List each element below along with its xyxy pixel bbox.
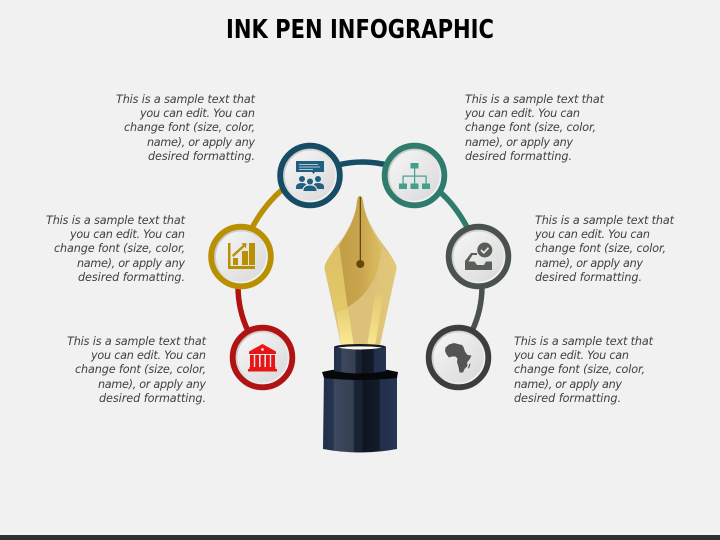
badge: hierarchy <box>385 146 444 205</box>
text block: bottom right: name), or apply any <box>514 378 622 391</box>
text block: bottom left: desired formatting. <box>99 392 206 405</box>
text block: bottom right <box>513 335 654 405</box>
badge: bank building <box>233 328 292 387</box>
text block: top right: This is a sample text that <box>465 93 605 106</box>
text block: top left: change font (size, color, <box>124 121 255 134</box>
text block: middle right: change font (size, color, <box>535 242 666 255</box>
text block: top left <box>116 93 256 163</box>
nib slit and breather hole <box>359 197 361 264</box>
text block: top left: This is a sample text that <box>116 93 256 106</box>
text block: top left: desired formatting. <box>148 150 255 163</box>
icon: bank <box>248 344 277 372</box>
text block: middle right <box>534 214 675 284</box>
nib body <box>325 196 396 347</box>
text block: top right: name), or apply any <box>465 136 573 149</box>
text block: top right: desired formatting. <box>465 150 572 163</box>
text block: top right <box>464 93 605 163</box>
text block: middle left: change font (size, color, <box>54 242 185 255</box>
text block: middle right: desired formatting. <box>535 271 642 284</box>
badge: growth chart <box>212 227 270 286</box>
badge: Africa map <box>429 328 488 387</box>
text block: middle left: name), or apply any <box>77 257 185 270</box>
text block: middle left <box>46 214 186 284</box>
text block: bottom left: you can edit. You can <box>90 349 206 362</box>
icon: bar chart with arrow <box>228 243 255 269</box>
footer bar <box>0 535 720 540</box>
text block: top right: change font (size, color, <box>465 121 596 134</box>
text block: middle right: you can edit. You can <box>534 228 650 241</box>
text block: middle left: This is a sample text that <box>46 214 186 227</box>
icon: org chart <box>399 163 430 189</box>
icon: speech board and people <box>296 161 324 191</box>
text block: bottom right: change font (size, color, <box>514 363 645 376</box>
badge: inbox with check <box>449 227 508 286</box>
text block: middle right: name), or apply any <box>535 257 643 270</box>
text block: middle left: desired formatting. <box>78 271 185 284</box>
badge: presentation audience <box>280 146 340 205</box>
icon: tray and check badge <box>465 242 492 270</box>
pen base <box>322 368 398 452</box>
text block: bottom left: This is a sample text that <box>67 335 207 348</box>
text block: top right: you can edit. You can <box>464 107 580 120</box>
text block: middle left: you can edit. You can <box>69 228 185 241</box>
text block: top left: you can edit. You can <box>139 107 255 120</box>
nib lower left highlight <box>336 308 354 347</box>
connector arcs <box>238 162 482 331</box>
text block: middle right: This is a sample text that <box>535 214 675 227</box>
title: INK PEN INFOGRAPHIC <box>226 15 494 45</box>
nib right highlight <box>367 248 396 347</box>
pen nib <box>325 196 396 347</box>
text block: top left: name), or apply any <box>147 136 255 149</box>
text block: bottom right: This is a sample text that <box>514 335 654 348</box>
text block: bottom left: name), or apply any <box>98 378 206 391</box>
text block: bottom left: change font (size, color, <box>75 363 206 376</box>
pen collar <box>334 344 386 374</box>
text block: bottom right: you can edit. You can <box>513 349 629 362</box>
nib upper shaded area <box>338 196 382 307</box>
text block: bottom right: desired formatting. <box>514 392 621 405</box>
icon: Africa <box>445 343 472 372</box>
nib left band <box>325 243 348 313</box>
text block: bottom left <box>67 335 207 405</box>
